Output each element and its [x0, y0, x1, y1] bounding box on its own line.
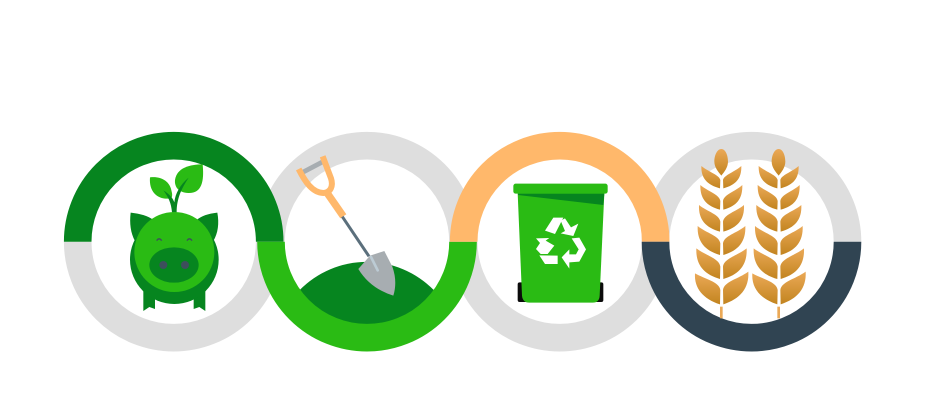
bin body — [518, 193, 604, 303]
ring 1 upper: dark green — [78, 146, 270, 242]
top grain — [714, 149, 728, 176]
ring 2 upper: grey — [271, 146, 463, 242]
sprout stem — [163, 178, 189, 212]
icon: shovel — [299, 156, 395, 296]
legs — [143, 288, 205, 311]
left leaf — [150, 177, 172, 199]
ring 4 upper: grey — [656, 146, 848, 242]
ring 4 lower: navy — [656, 242, 848, 338]
arrow left — [536, 238, 554, 254]
steel shaft — [342, 217, 369, 256]
eyes — [157, 239, 192, 241]
arrow right — [562, 238, 586, 269]
lid shadow — [518, 194, 604, 205]
wheat stalk 1 — [695, 149, 748, 318]
head — [134, 212, 214, 292]
icon: wheat stalks — [695, 149, 806, 318]
lid — [513, 184, 608, 194]
left grains — [752, 273, 778, 304]
blade highlight — [371, 257, 378, 270]
ring 3 lower: grey — [464, 242, 656, 338]
body — [130, 215, 219, 304]
nostrils — [159, 261, 167, 269]
wheat stalk 2 — [752, 149, 806, 318]
arrow top right — [561, 218, 578, 236]
recycling symbol — [536, 218, 586, 269]
icon: piggy bank with sprout — [130, 164, 219, 311]
ring 2 lower: bright green — [271, 242, 463, 338]
handle shaft — [327, 192, 343, 216]
left grains — [695, 273, 720, 304]
soil mound — [294, 262, 440, 335]
stem — [720, 307, 723, 318]
grip bar — [303, 162, 322, 172]
ring 3 upper: orange — [464, 146, 656, 242]
icon: recycling bin — [513, 184, 608, 303]
ring 1 lower: grey — [78, 242, 270, 338]
right leaf — [175, 164, 203, 193]
ears — [130, 213, 218, 241]
stem — [777, 307, 780, 318]
blade — [358, 251, 395, 296]
arrow bottom block — [539, 255, 558, 264]
handle grip — [299, 156, 332, 193]
right grains — [723, 272, 748, 304]
right grains — [780, 272, 806, 304]
top grain — [772, 149, 785, 176]
snout — [149, 247, 199, 283]
wheels — [518, 282, 603, 302]
arrow top left block — [545, 218, 563, 234]
